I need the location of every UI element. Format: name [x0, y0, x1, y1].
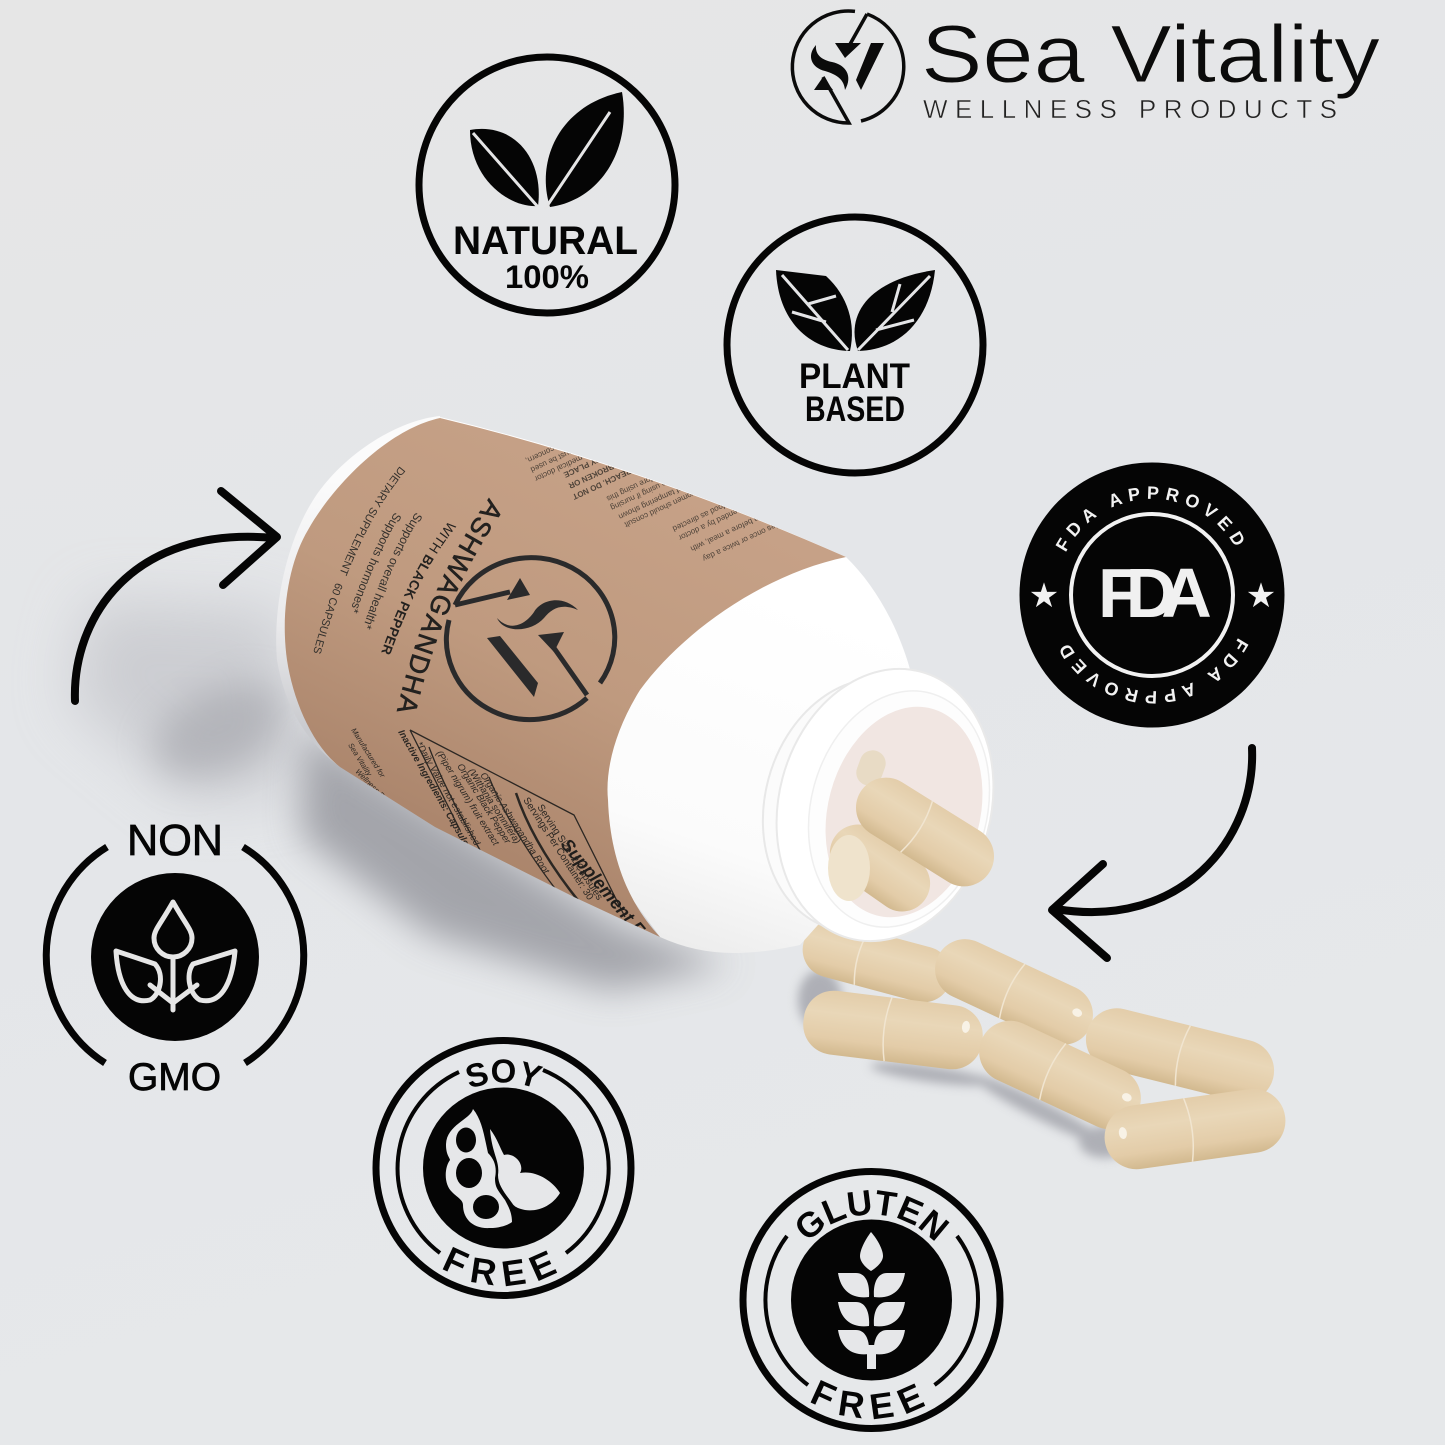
star right: ★: [1246, 576, 1276, 616]
rear label directions text: consult doctor before using if nursing: [609, 449, 731, 512]
ingredients list: (Piper nigrum) fruit extract: [433, 749, 501, 848]
rear label directions text: adults. Pregnant women should consult: [622, 462, 754, 530]
arrow: right curved: [1052, 748, 1252, 958]
ingredients list: Organic Ashwagandha Root: [477, 771, 551, 876]
FDA wordmark: FDA: [1098, 554, 1210, 632]
free label: FREE: [442, 1246, 558, 1286]
icon: sprout with drop: [116, 902, 235, 1010]
label text: supports hormones: Supports hormones*: [352, 513, 401, 614]
rear label directions text: [526, 448, 778, 561]
panel rules: [410, 730, 625, 917]
badge: FDA approved: [1020, 462, 1284, 728]
ingredients list: (Withania somnifera): [465, 767, 522, 846]
rear label directions text: supplement daily with food as directed: [671, 468, 798, 533]
based label: BASED: [805, 390, 905, 429]
star left: ★: [1029, 576, 1059, 616]
curved text top: FDA APPROVED: [1056, 486, 1244, 552]
manufacturer text: Sea Vitality: [346, 741, 374, 779]
supplement facts panel: [348, 728, 646, 930]
serving text: Serving Size: 2 Capsules: [534, 803, 605, 902]
logo: Sea Vitality: [792, 9, 1380, 124]
bottle base end: [276, 416, 460, 767]
free label: FREE: [810, 1380, 926, 1420]
gluten label: GLUTEN: [797, 1190, 950, 1241]
rear label directions text: not use if any sign of tampering shown: [617, 455, 745, 521]
label text: dietary supplement: DIETARY SUPPLEMENT 60 CAPSULES: [314, 466, 406, 654]
ingredients list: *Daily Value not established: [413, 740, 482, 848]
rear label directions text: water or as recommended by a doctor: [677, 477, 804, 542]
capsule A behind bottle rim: [796, 915, 958, 1030]
badge: gluten free: [740, 1168, 1004, 1432]
capsule shadows: [869, 1058, 1131, 1158]
soy label: SOY: [466, 1059, 544, 1087]
capsule E: [1079, 1002, 1281, 1108]
rear label directions text: IF SAFETY SEAL IS BROKEN OR: [567, 429, 684, 490]
GMO label: GMO: [128, 1056, 221, 1099]
non label: NON: [127, 816, 223, 865]
capsule C: [925, 929, 1103, 1055]
badge: natural 100%: [419, 57, 675, 313]
rear label directions text: STORE IN A COOL, DRY PLACE: [562, 420, 675, 480]
bottle: [276, 416, 994, 953]
manufacturer text: Manufactured for: [349, 726, 387, 780]
curved text bottom: FDA APPROVED: [1060, 638, 1248, 704]
100% label: 100%: [505, 259, 589, 295]
brand name: Sea Vitality: [921, 9, 1380, 100]
icon: soybean pod: [446, 1109, 560, 1228]
servings per container text: Servings Per Container: 30: [520, 796, 595, 903]
badge: non GMO: [46, 816, 304, 1099]
plant label: PLANT: [799, 357, 910, 396]
supplement facts title: Supplement Facts: [557, 835, 672, 966]
icon: two leaves: [470, 92, 624, 209]
rear label directions text: at first sign, it feels like a quality concern,: [524, 396, 660, 465]
rear label directions text: 20-30 min before a meal, with: [689, 501, 788, 553]
ingredients list: Organic Black Pepper: [454, 762, 513, 847]
product label: [285, 418, 846, 937]
ingredients list: Inactive Ingredients: Capsule: [395, 728, 471, 848]
capsule D: [969, 1011, 1151, 1139]
label text: with black pepper: WITH BLACK PEPPER: [381, 523, 456, 654]
rear label directions text: ask a health adviser before using this: [605, 439, 729, 503]
arrow: left curved: [75, 491, 277, 701]
logo mark: [792, 11, 904, 123]
label logo mark: [446, 558, 615, 720]
icon: plant leaves: [776, 270, 935, 351]
badge: plant based: [727, 217, 983, 473]
manufacturer text: [348, 728, 384, 795]
manufacturer text: Wellness Products, USA packaging: [354, 767, 444, 857]
capsule B: [800, 987, 986, 1073]
rear label directions text: pharmacist. This product must be used: [529, 408, 658, 474]
badge: soy free: [372, 1037, 634, 1299]
rear label directions text: (1) capsules once or twice a day: [701, 507, 809, 563]
capsule F: [1100, 1085, 1290, 1173]
natural label: NATURAL: [453, 219, 638, 263]
loose capsules: [800, 929, 1290, 1173]
bottle neck rim: [735, 644, 1023, 966]
rear label directions text: should be evaluated by a medical doctor: [533, 415, 667, 483]
icon: wheat: [838, 1232, 905, 1369]
brand tagline: WELLNESS PRODUCTS: [923, 94, 1337, 124]
bottle body: [440, 417, 930, 953]
label text: ashwagandha: ASHWAGANDHA: [396, 498, 500, 712]
rear label directions text: KEEP OUT OF REACH. DO NOT: [571, 442, 684, 501]
label text: supports health: Supports overall health*: [364, 513, 422, 630]
ingredients list: [395, 728, 551, 876]
capsules in bottle: [819, 747, 1005, 922]
bottle shadow: [70, 600, 730, 990]
